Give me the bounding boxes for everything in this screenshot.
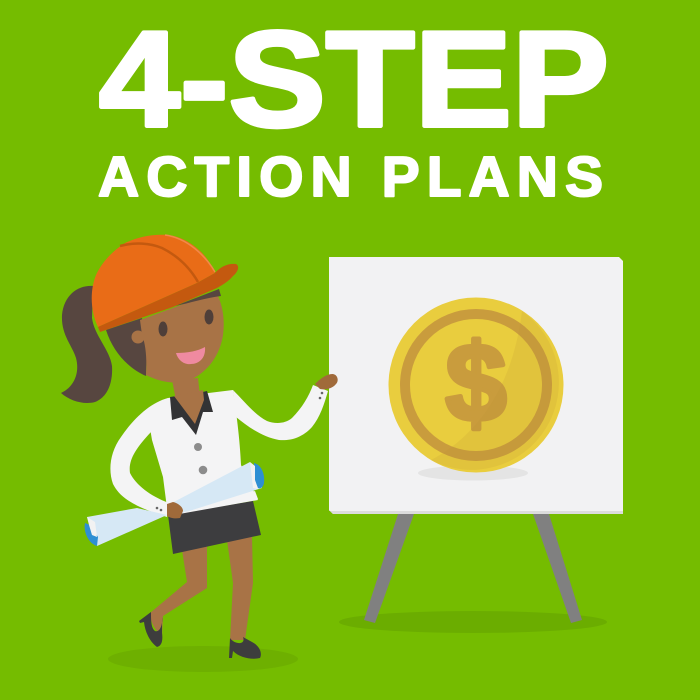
cuff buttons xyxy=(156,392,323,511)
blueprint right end xyxy=(254,463,264,488)
presentation board xyxy=(329,257,623,514)
hat brim xyxy=(98,264,238,332)
character: woman in hard hat xyxy=(61,235,338,659)
left hand xyxy=(167,502,183,518)
neck v xyxy=(174,390,204,424)
easel ground shadow xyxy=(339,611,607,633)
right arm sleeve xyxy=(233,385,328,440)
coin icon xyxy=(388,298,564,472)
coin sheen xyxy=(431,311,559,470)
shirt body xyxy=(147,390,258,516)
left arm sleeve xyxy=(110,398,169,517)
fringe hair xyxy=(175,289,221,306)
legs xyxy=(150,535,253,640)
hard hat xyxy=(92,235,238,332)
shoes xyxy=(139,612,261,659)
back hair xyxy=(106,318,147,376)
character ground shadow xyxy=(108,646,298,672)
subtitle: ACTION PLANS: ACTION PLANS xyxy=(98,145,603,209)
collar xyxy=(170,391,213,435)
coin shadow xyxy=(418,466,528,480)
ear xyxy=(132,330,144,344)
eyes xyxy=(158,322,168,336)
neck xyxy=(172,378,201,425)
face xyxy=(140,292,224,382)
shirt buttons xyxy=(194,443,207,474)
ponytail xyxy=(61,286,112,403)
mouth xyxy=(176,347,205,364)
skirt xyxy=(168,501,261,554)
blueprint roll xyxy=(85,462,264,546)
dollar sign: $ xyxy=(445,322,507,445)
shirt strip xyxy=(183,491,258,513)
easel legs xyxy=(364,514,582,623)
blueprint left end xyxy=(85,523,98,546)
right hand xyxy=(315,374,338,389)
title: 4-STEP: 4-STEP xyxy=(99,3,609,155)
